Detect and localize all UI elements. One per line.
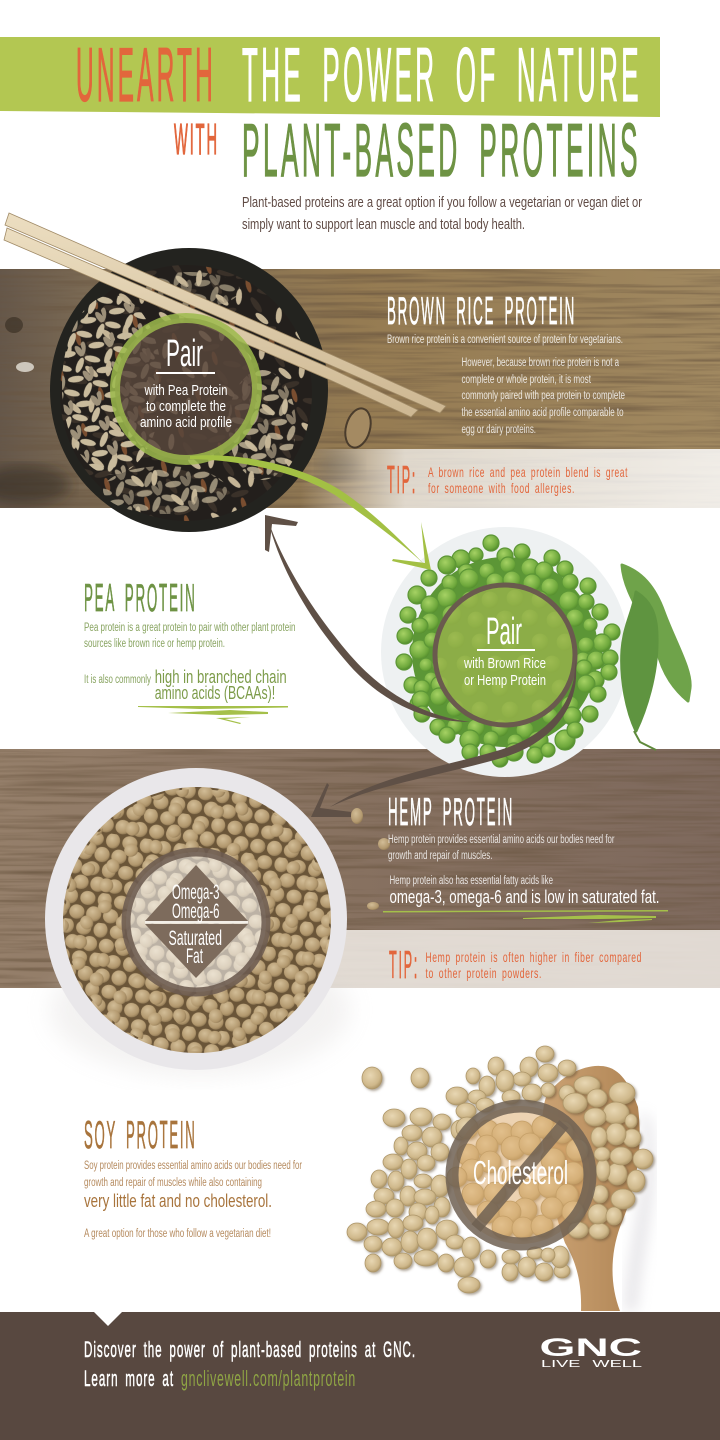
panel: pea protein: PEA PROTEIN: [84, 577, 196, 620]
callout: pair with brown rice or hemp: or Hemp Protein: [464, 672, 546, 689]
body text: hemp: Hemp protein provides essential amino acids our bodies need for: [388, 834, 615, 846]
callout: omega diamond: Fat: [186, 945, 203, 968]
panel: hemp protein: [0, 749, 720, 1076]
body text: soy: [84, 1160, 302, 1240]
tip: hemp: TIP:: [389, 944, 419, 987]
logo: GNC: GNC: [540, 1334, 642, 1362]
body text: hemp: Hemp protein also has essential fatty acids like: [390, 875, 553, 887]
icon: wooden spoon: [542, 1066, 640, 1311]
arrow: brown pea to rice: [265, 515, 470, 722]
icon: brush underline: [138, 706, 288, 724]
highlight text: cholesterol: very little fat and no cholesterol.: [84, 1191, 272, 1211]
panel: soy protein: [84, 1046, 654, 1311]
tip: brown rice: TIP:: [387, 459, 417, 502]
icon: chopsticks: [4, 213, 446, 417]
link: gnclivewell.com/plantprotein: [181, 1366, 356, 1391]
highlight text: bcaas: amino acids (BCAAs)!: [155, 683, 275, 703]
panel: brown rice protein: [0, 213, 720, 532]
tip band: [300, 930, 720, 988]
callout: pair with pea protein: amino acid profile: [140, 414, 232, 431]
body text: soy: growth and repair of muscles while also containing: [84, 1177, 262, 1189]
arrow: brown pea to hemp: [311, 660, 576, 817]
notch: [94, 1312, 122, 1326]
footer band: [0, 1312, 720, 1440]
panel: header: [0, 33, 660, 233]
callout: pair with brown rice or hemp: with Brown Rice: [463, 655, 546, 672]
callout: pair with pea protein: [115, 318, 257, 460]
icon: peas: [396, 535, 620, 767]
logo: GNC: [540, 1334, 642, 1370]
body text: brown rice: complete or whole protein, it is most: [462, 374, 592, 386]
wood background: [0, 269, 720, 508]
callout: omega diamond: Saturated: [168, 927, 222, 950]
panel: header: WITH: [174, 115, 219, 164]
callout: omega diamond: [126, 852, 266, 992]
icon: hemp bowl: [45, 768, 347, 1070]
tip: hemp: [389, 944, 642, 987]
body text: soy: A great option for those who follow a vegetarian diet!: [84, 1228, 271, 1240]
body text: pea: [84, 622, 296, 686]
body text: soy: Soy protein provides essential amino acids our bodies need for: [84, 1160, 302, 1172]
callout: pair with brown rice or hemp: Pair: [486, 611, 522, 653]
icon: soybeans: [347, 1046, 653, 1293]
intro text: simply want to support lean muscle and total body health.: [242, 217, 525, 233]
icon: spoon shadow: [625, 1110, 654, 1311]
body text: brown rice: commonly paired with pea protein to complete: [462, 390, 625, 402]
body text: hemp: growth and repair of muscles.: [388, 850, 492, 862]
wood background: [0, 749, 720, 988]
body text: pea: It is also commonly: [84, 674, 151, 686]
body text: brown rice: However, because brown rice protein is not a: [462, 357, 619, 369]
icon: rice bowl: [50, 248, 328, 532]
intro text: [242, 195, 642, 233]
callout: pair with pea protein: Pair: [166, 333, 203, 375]
body text: brown rice: egg or dairy proteins.: [462, 424, 536, 436]
panel: soy protein: SOY PROTEIN: [84, 1114, 196, 1157]
arrow: green rice to pea: [190, 455, 431, 570]
icon: bowl shadow: [50, 944, 350, 1076]
body text: brown rice: [387, 334, 625, 436]
tip band: [300, 449, 720, 508]
tip: hemp: to other protein powders.: [426, 965, 542, 981]
tip: brown rice: for someone with food allergies.: [428, 480, 575, 496]
callout: pair with brown rice or hemp: [435, 585, 575, 725]
body text: brown rice: the essential amino acid profile comparable to: [462, 407, 624, 419]
icon: peas underlayer: [412, 557, 598, 747]
panel: footer: [0, 1312, 720, 1440]
icon: pea pods: [622, 565, 690, 750]
title band: [0, 37, 660, 117]
highlight text: bcaas: high in branched chain: [155, 667, 287, 687]
icon: pea plate: [381, 527, 629, 777]
body text: hemp: [388, 834, 615, 887]
callout: pair with pea protein: with Pea Protein: [144, 382, 228, 399]
callout: omega diamond: Omega-6: [172, 900, 220, 923]
highlight text: bcaas: [155, 667, 287, 703]
tip: brown rice: [387, 459, 628, 502]
panel: pea protein: [84, 527, 690, 777]
body text: pea: sources like brown rice or hemp protein.: [84, 638, 225, 650]
callout: no cholesterol: Cholesterol: [473, 1154, 568, 1191]
body text: pea: Pea protein is a great protein to pair with other plant protein: [84, 622, 296, 634]
callout: no cholesterol: [452, 1106, 590, 1244]
icon: stray hemp seeds: [351, 808, 390, 910]
call to action line 2: Learn more at: [84, 1366, 174, 1391]
icon: brush underline: [383, 910, 668, 923]
callout: pair with pea protein: to complete the: [146, 398, 226, 415]
call to action line 1: Discover the power of plant-based proteins at GNC.: [84, 1337, 416, 1362]
panel: header: UNEARTH: [76, 33, 216, 118]
logo: GNC: LIVE WELL: [541, 1358, 642, 1370]
callout: omega diamond: Omega-3: [172, 881, 220, 904]
